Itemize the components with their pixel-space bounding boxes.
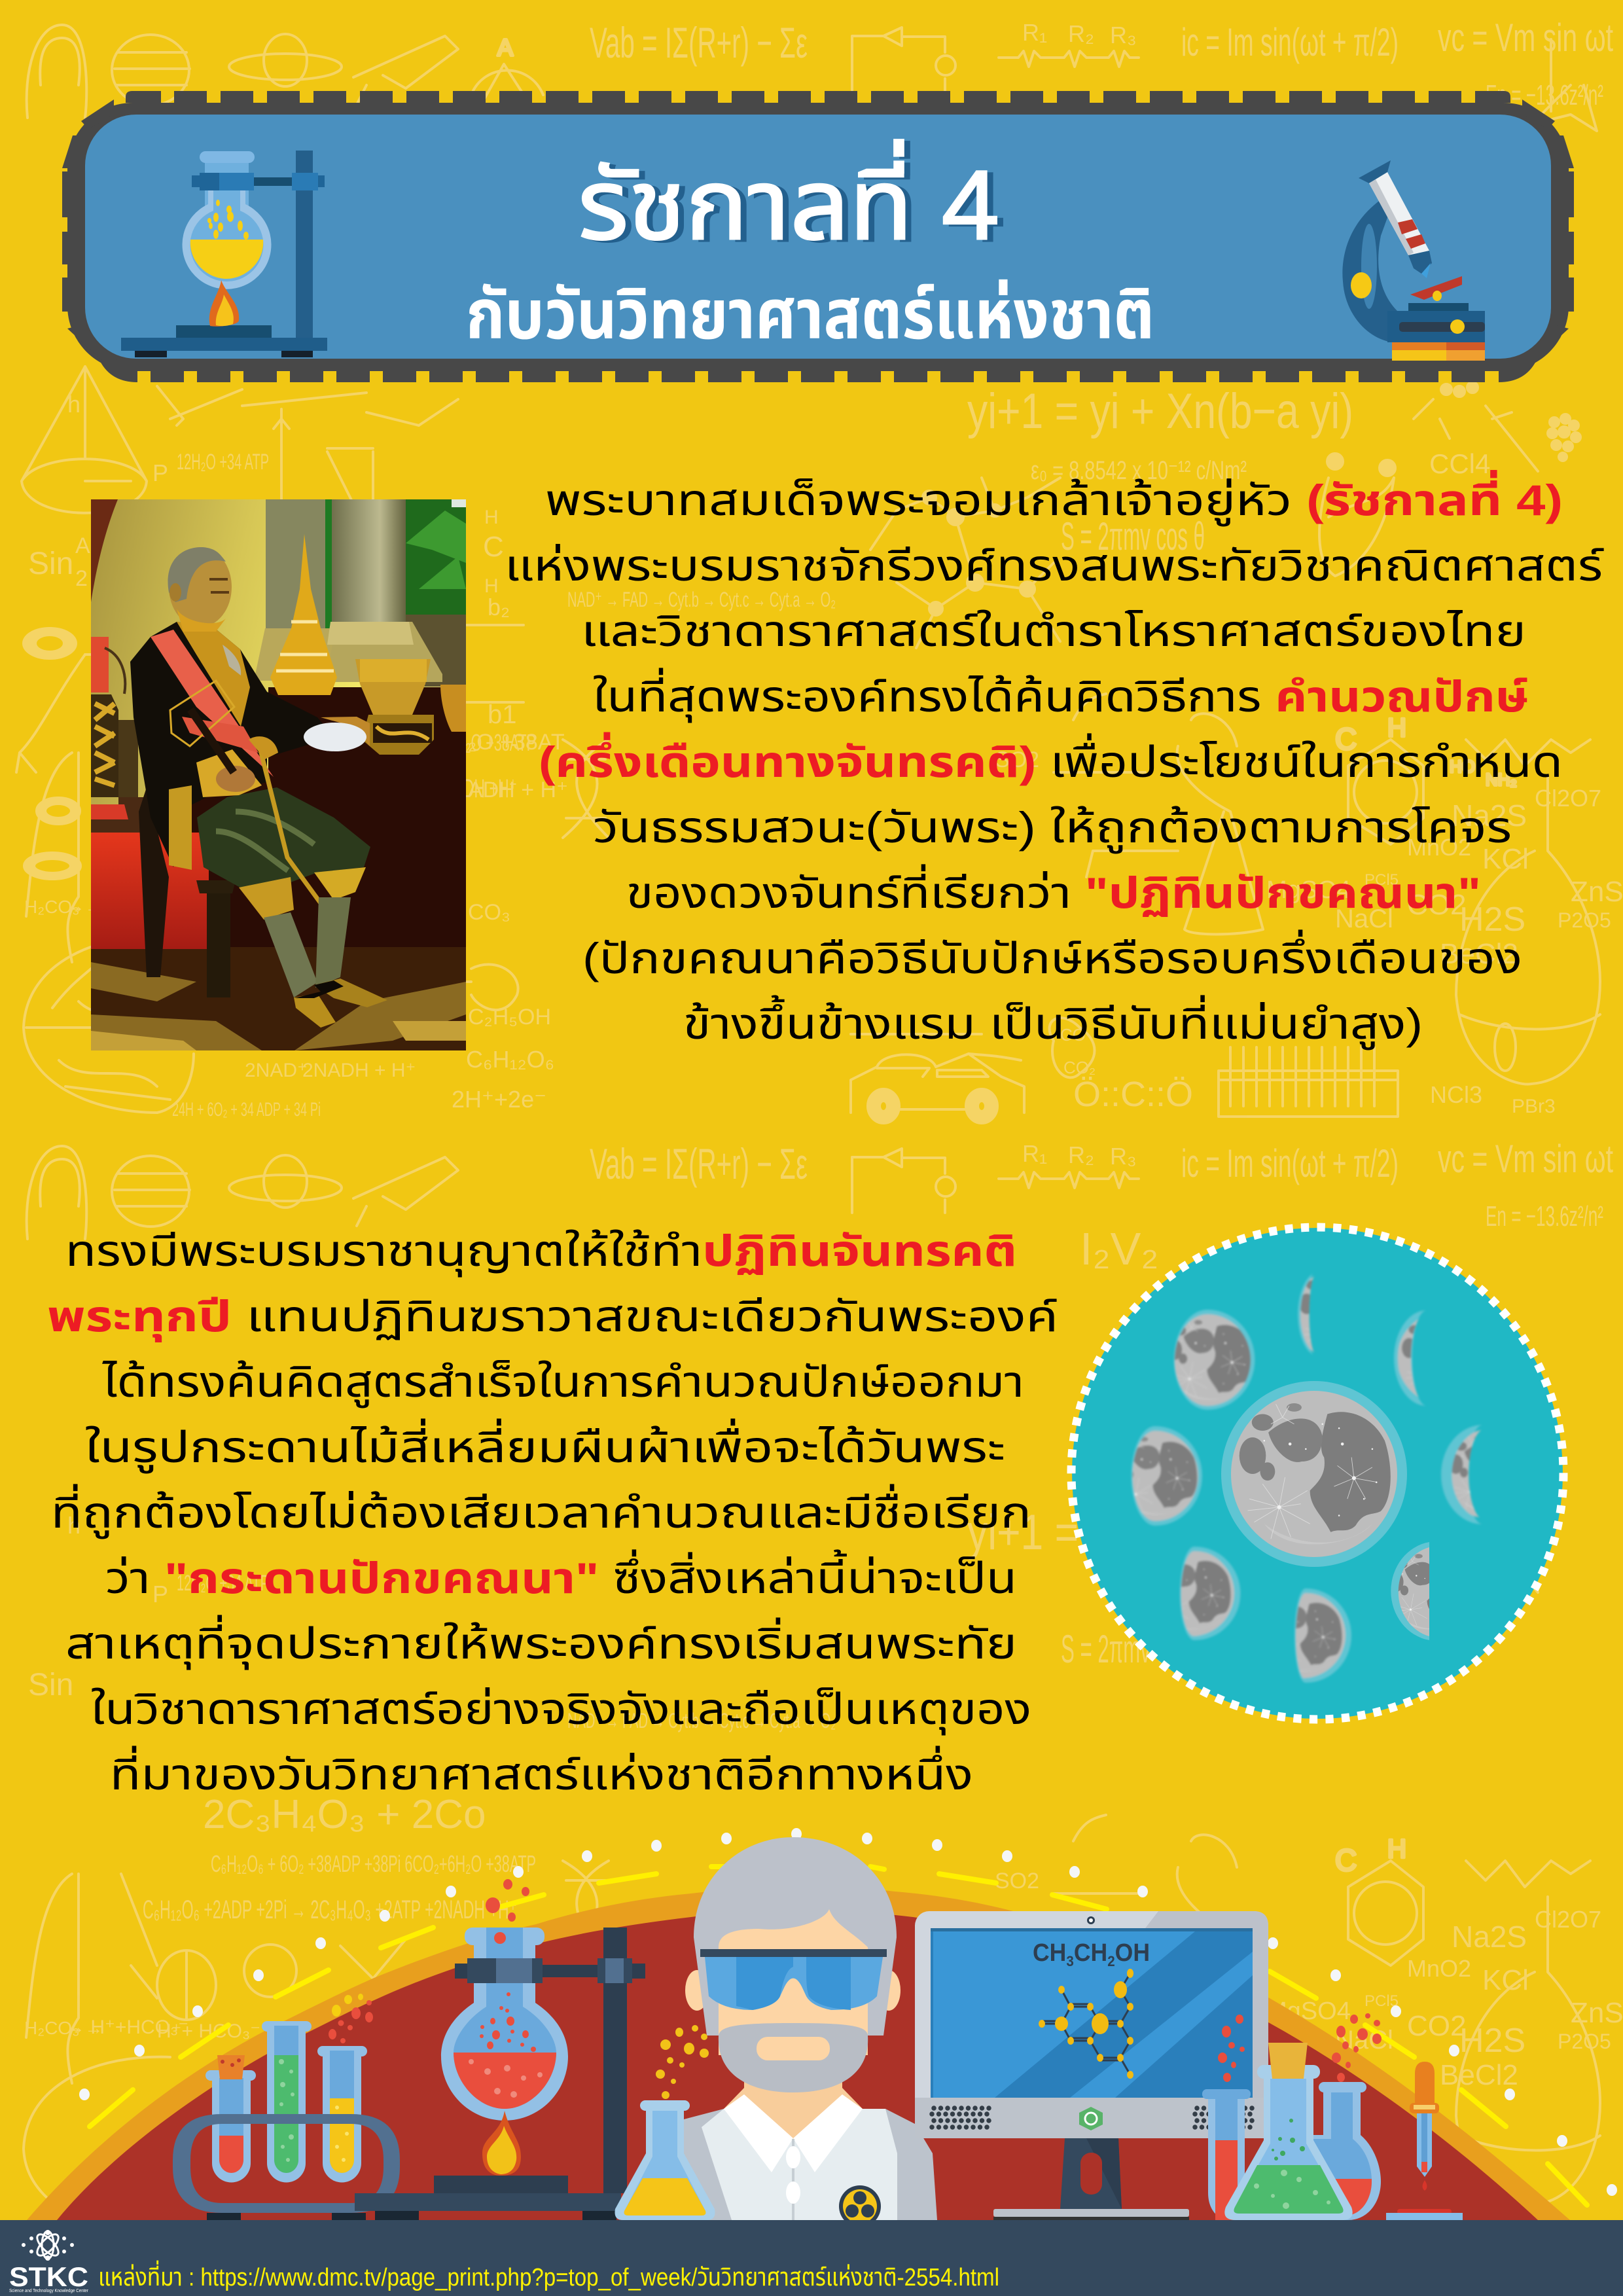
paragraph 1: ของดวงจันทร์ที่เรียกว่า "ปฏิทินปักขคณนา" <box>626 864 1481 917</box>
background doodles: upper tile: Cl2O7 <box>1535 785 1601 812</box>
dome: red <box>57 1910 1538 2220</box>
molecule formula: 3 <box>1066 1953 1074 1969</box>
monitor stand <box>993 2138 1189 2220</box>
title line 1: รัชกาลที่ 4 <box>578 139 999 260</box>
background doodles: upper tile: Na2S <box>1452 798 1527 833</box>
background doodles: lower tile: I₂V₂ <box>1080 1223 1158 1274</box>
yellow bubbles <box>656 2025 709 2099</box>
molecule formula: OH <box>1115 1939 1150 1967</box>
background doodles: upper tile: A <box>497 34 513 61</box>
red bubbles <box>1218 2013 1382 2082</box>
background doodles: lower tile: ic = Im sin(ωt + π/2) <box>1181 1141 1399 1185</box>
background doodles: upper tile: H2S <box>1459 901 1525 939</box>
paragraph 1: (ครึ่งเดือนทางจันทรคติ) เพื่อประโยชน์ในการกำหนด <box>539 732 1563 786</box>
white dots <box>79 1828 1617 2196</box>
background doodles: upper tile: ε₀ = 8.8542 x 10⁻¹² c/Nm² <box>1031 456 1247 485</box>
background doodles: upper tile: A <box>75 533 90 558</box>
background doodles: lower tile: Cl2O7 <box>1535 1906 1601 1933</box>
background doodles: upper tile: h <box>67 391 80 418</box>
moon phase: upper right crescent <box>1393 1310 1425 1407</box>
coat badge <box>839 2185 881 2227</box>
background doodles: upper tile: ₂O +38AT <box>468 730 565 755</box>
background doodles: upper tile: 2 <box>75 566 88 591</box>
icon: microscope <box>1342 160 1485 361</box>
background doodles: lower tile: H <box>1387 1835 1406 1863</box>
background doodles: upper tile: H <box>1387 713 1406 742</box>
background doodles: upper tile: MnO2 <box>1407 834 1471 861</box>
title line 2: กับวันวิทยาศาสตร์แห่งชาติ <box>466 276 1154 353</box>
paragraph 1: แห่งพระบรมราชจักรีวงศ์ทรงสนพระทัยวิชาคณิตศาสตร์ <box>505 541 1605 590</box>
background doodles: upper tile: 2NAD⁺ <box>245 1060 308 1081</box>
paragraph 1 <box>505 470 1605 1050</box>
background doodles: lower tile: 2C₃H₄O₃ + 2Co <box>203 1792 486 1837</box>
background doodles: upper tile: CO₃ <box>468 900 510 925</box>
laboratory illustration <box>27 1828 1617 2227</box>
full moon <box>1221 1381 1407 1567</box>
background doodles: lower tile: Vab = IΣ(R+r) − Σε <box>590 1139 808 1188</box>
background doodles: upper tile: 12H₂O +34 ATP <box>177 450 269 475</box>
conical flask yellow <box>615 2100 715 2220</box>
background doodles: upper tile: NAD⁺ → FAD → Cyt.b → Cyt.c → Cyt.a → O₂ <box>567 588 836 611</box>
background doodles: upper tile: KCl <box>1482 843 1529 875</box>
background doodles: lower tile: → H⁺+HCO₃⁻ <box>65 2017 188 2038</box>
background doodles: upper tile: Sin <box>28 547 73 581</box>
logo: STKC <box>9 2230 89 2293</box>
background doodles: upper tile: CCl4 <box>1429 448 1490 479</box>
background doodles: upper tile: R₁ <box>1022 19 1047 46</box>
background doodles: upper tile: ADH + H⁺ <box>468 778 568 802</box>
background doodles: upper tile: Ö::C::Ö <box>1073 1075 1193 1114</box>
molecule formula: CH <box>1074 1939 1107 1967</box>
background doodles: lower tile: C₆H₁₂O₆ + 6O₂ +38ADP +38Pi 6CO₂+6H₂O +38ATP <box>211 1850 536 1877</box>
background doodles: upper tile: S = 2πmv cos θ <box>1061 514 1205 558</box>
background doodles: lower tile <box>24 1137 1623 2234</box>
background doodles: upper tile: BeCl2 <box>1440 938 1518 970</box>
dome: orange band <box>27 1887 1570 2220</box>
round flask <box>1283 2082 1381 2220</box>
background doodles: lower tile: h <box>67 1512 80 1539</box>
paragraph 2: ที่ถูกต้องโดยไม่ต้องเสียเวลาคำนวณและมีชื่อเรียก <box>51 1484 1031 1539</box>
background doodles: lower tile: SO2 <box>995 1869 1039 1893</box>
background doodles: lower tile: R₁ <box>1022 1140 1047 1167</box>
conical flask green <box>1224 2043 1353 2220</box>
background doodles: upper tile: C₆H₁₂O₆ <box>466 1046 554 1073</box>
paragraph 1: พระบาทสมเด็จพระจอมเกล้าเจ้าอยู่หัว (รัชกาลที่ 4) <box>545 470 1563 527</box>
paragraph 2: ที่มาของวันวิทยาศาสตร์แห่งชาติอีกทางหนึ่ง <box>110 1746 973 1799</box>
paragraph 1: ข้างขึ้นข้างแรม เป็นวิธีนับที่แม่นยำสูง) <box>683 995 1423 1050</box>
background doodles: upper tile: HO <box>1450 757 1475 776</box>
red bubbles above flask <box>486 1879 529 1922</box>
background doodles: upper tile <box>16 16 1623 1123</box>
background doodles: upper tile: C <box>1335 722 1357 756</box>
moon phase: lower right half <box>1391 1542 1429 1640</box>
background doodles: upper tile: NH₂ <box>1486 770 1517 789</box>
background doodles: lower tile: C₆H₁₂O₆ +2ADP +2Pi → 2C₃H₄O₃ +2ATP +2NADH +H⁺ <box>143 1895 517 1924</box>
paragraph 2: ได้ทรงค้นคิดสูตรสำเร็จในการคำนวณปักษ์ออกมา <box>102 1357 1024 1408</box>
burner stand with round flask <box>355 1928 645 2220</box>
icon: flask on stand <box>121 151 327 357</box>
paragraph 1: วันธรรมสวนะ(วันพระ) ให้ถูกต้องตามการโคจร <box>593 803 1512 854</box>
moon phase: left gibbous <box>1130 1426 1203 1526</box>
background doodles: lower tile: Sin <box>28 1668 73 1702</box>
background doodles: upper tile: P2O5 <box>1558 908 1611 932</box>
banner blue panel <box>85 115 1551 359</box>
background doodles: upper tile: 2NADH + H⁺ <box>302 1060 416 1081</box>
background doodles: lower tile: 12H₂O +34 ATP <box>177 1571 269 1596</box>
molecule formula: CH <box>1033 1939 1069 1967</box>
background doodles: upper tile: NaCl <box>1335 905 1393 933</box>
background doodles: upper tile: R₃ <box>1110 22 1137 48</box>
background doodles: lower tile: P2O5 <box>1558 2030 1611 2053</box>
paragraph 2: ทรงมีพระบรมราชานุญาตให้ใช้ทำ ปฏิทินจันทรคติ <box>65 1227 1017 1277</box>
moon phase: bottom gibbous <box>1293 1588 1353 1683</box>
right flasks <box>1202 2013 1382 2220</box>
bubbles near test tubes <box>329 1994 373 2043</box>
background doodles: upper tile: SO2 <box>995 747 1039 772</box>
background doodles: upper tile: b₂ <box>488 594 510 620</box>
background doodles: lower tile: NAD⁺ → FAD → Cyt.b → Cyt.c → Cyt.a → O₂ <box>567 1709 836 1732</box>
background doodles: upper tile: C <box>483 531 504 563</box>
test tube <box>1202 2089 1251 2220</box>
background doodles: upper tile: CO <box>1060 1025 1086 1045</box>
background doodles: upper tile: → H⁺+HCO₃⁻ <box>65 895 188 917</box>
background doodles: upper tile: H <box>484 507 499 528</box>
background doodles: upper tile: PCl5 <box>1364 871 1399 889</box>
background doodles: lower tile: yi+1 = yi + Xn(b−a yi) <box>967 1505 1353 1560</box>
background doodles: upper tile: CO2 <box>1407 889 1466 921</box>
background doodles: upper tile: CO₂ <box>1063 1058 1096 1077</box>
scientist <box>684 1837 937 2227</box>
background doodles: lower tile: S = 2πmv cos θ <box>1061 1627 1205 1671</box>
logo: STKC: Science and Technology Knowledge Center <box>9 2289 89 2293</box>
paragraph 1: ในที่สุดพระองค์ทรงได้ค้นคิดวิธีการ คำนวณปักษ์ <box>593 668 1529 723</box>
background doodles: lower tile: P <box>152 1581 168 1607</box>
logo: STKC: STKC <box>9 2261 88 2292</box>
background doodles: upper tile: C₂H₅OH <box>468 1005 551 1030</box>
background doodles: lower tile: PCl5 <box>1364 1992 1399 2010</box>
background doodles: upper tile: Vab = IΣ(R+r) − Σε <box>590 18 808 67</box>
banner gear frame <box>62 91 1574 382</box>
background doodles: upper tile: H <box>484 575 499 597</box>
paragraph 2 <box>47 1227 1058 1799</box>
power button <box>1079 2107 1103 2130</box>
paragraph 2: ในวิชาดาราศาสตร์อย่างจริงจังและถือเป็นเหตุของ <box>91 1685 1031 1735</box>
background doodles: lower tile: MgSO4 <box>1266 1998 1351 2025</box>
background doodles: lower tile: H₂CO₃ → <box>24 2018 103 2038</box>
background doodles: lower tile: NaCl <box>1335 2026 1393 2054</box>
background doodles: upper tile: 2H⁺+2e⁻ <box>452 1086 546 1113</box>
background doodles: upper tile: b1 <box>488 700 517 729</box>
background doodles: lower tile: Na2S <box>1452 1920 1527 1954</box>
background doodles: upper tile: PBr3 <box>1512 1096 1556 1117</box>
moon phase: top crescent <box>1297 1274 1315 1355</box>
portrait photo of King Rama IV <box>91 499 466 1050</box>
background doodles: upper tile: H⁺+ HCO₃⁻ → H₂C <box>157 899 327 921</box>
title line 1: รัชกาลที่ 4 <box>584 141 1005 262</box>
background doodles: upper tile: NCl3 <box>1430 1081 1482 1108</box>
molecule diagram <box>1039 1969 1133 2079</box>
background doodles: lower tile: C <box>1335 1843 1357 1877</box>
background doodles: upper tile: C₆H₁₂O₆ +2ADP +2Pi → 2C₃H₄O₃ +2ATP +2NADH +H⁺ <box>143 774 517 803</box>
speaker grilles <box>932 2108 1253 2127</box>
background doodles: upper tile: P <box>152 459 168 486</box>
background doodles: lower tile: MnO2 <box>1407 1955 1471 1982</box>
background doodles: lower tile: R₃ <box>1110 1143 1137 1170</box>
background doodles: lower tile: R₂ <box>1068 1141 1094 1168</box>
paragraph 2: ในรูปกระดานไม้สี่เหลี่ยมผืนผ้าเพื่อจะได้วันพระ <box>85 1418 1005 1474</box>
background doodles: upper tile: MgSO4 <box>1266 876 1351 904</box>
background doodles: upper tile: R₂ <box>1068 20 1094 47</box>
source citation: แหล่งที่มา : https://www.dmc.tv/page_print.php?p=top_of_week/วันวิทยาศาสตร์แห่งชาติ-2554.html <box>98 2260 999 2291</box>
paragraph 1: และวิชาดาราศาสตร์ในตำราโหราศาสตร์ของไทย <box>581 607 1526 655</box>
background doodles: lower tile: H2S <box>1459 2022 1525 2060</box>
goggles <box>700 1949 887 2010</box>
background doodles: lower tile: CO2 <box>1407 2010 1466 2042</box>
dropper <box>1386 2062 1463 2220</box>
footer bar <box>0 2220 1623 2296</box>
background doodles: upper tile: H₂CO₃ → <box>24 897 103 917</box>
molecule formula: 2 <box>1107 1953 1115 1969</box>
background doodles: upper tile: C₆H₁₂O₆ + 6O₂ +38ADP +38Pi 6CO₂+6H₂O +38ATP <box>211 729 536 756</box>
background doodles: lower tile: H⁺+ HCO₃⁻ → H₂C <box>157 2020 327 2042</box>
moon phase: right crescent <box>1440 1424 1482 1525</box>
computer monitor <box>915 1911 1268 2220</box>
background doodles: lower tile: BeCl2 <box>1440 2059 1518 2091</box>
background doodles: lower tile: KCl <box>1482 1964 1529 1996</box>
paragraph 1: (ปักขคณนาคือวิธีนับปักษ์หรือรอบครึ่งเดือนของ <box>582 929 1522 982</box>
paragraph 2: สาเหตุที่จุดประกายให้พระองค์ทรงเริ่มสนพระทัย <box>65 1615 1017 1670</box>
paragraph 2: ว่า "กระดานปักขคณนา" ซึ่งสิ่งเหล่านี้น่าจะเป็น <box>105 1549 1017 1602</box>
title banner <box>62 91 1574 382</box>
background doodles: upper tile: 24H + 6O₂ + 34 ADP + 34 Pi <box>172 1099 321 1121</box>
moon phases circle <box>1071 1227 1563 1719</box>
background doodles: upper tile: yi+1 = yi + Xn(b−a yi) <box>967 384 1353 439</box>
test tubes in rack <box>173 2021 400 2220</box>
background doodles: upper tile: ic = Im sin(ωt + π/2) <box>1181 20 1399 64</box>
paragraph 2: พระทุกปี แทนปฏิทินฆราวาสขณะเดียวกันพระองค์ <box>47 1292 1058 1342</box>
moon phase: upper left gibbous <box>1173 1309 1256 1411</box>
yellow streaks <box>90 1867 1587 2205</box>
moon phase: lower left gibbous <box>1179 1546 1241 1641</box>
